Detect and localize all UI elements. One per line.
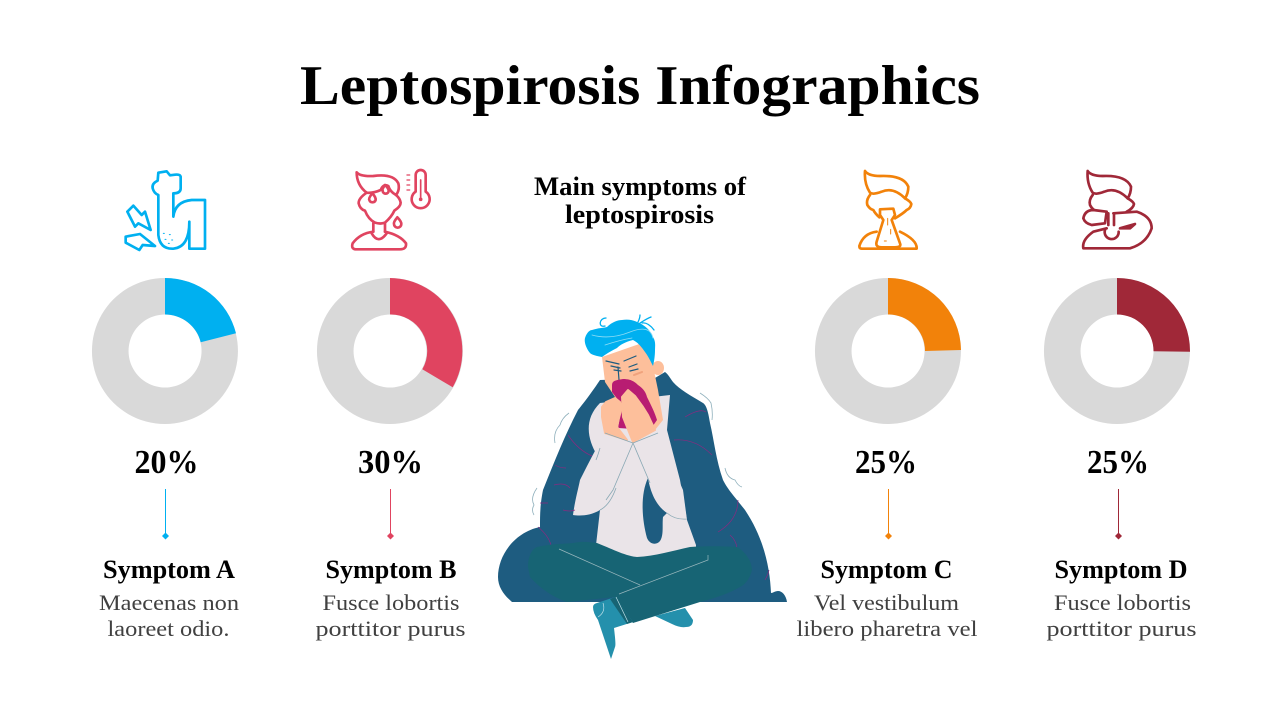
description B: Fusce lobortis (322, 590, 460, 615)
value: 30%: 30% (358, 444, 423, 481)
shiver lines (532, 393, 742, 515)
shirt (573, 395, 696, 565)
value: 25%: 25% (855, 444, 917, 481)
description C: Vel vestibulum (814, 590, 959, 615)
heading: Symptom A: Symptom A (103, 555, 235, 584)
hair strands (592, 315, 654, 345)
icon: arm with muscle pain (126, 171, 205, 250)
description D (1046, 590, 1196, 641)
leader line (387, 489, 394, 540)
panel: center illustration, sick man in blanket (498, 315, 787, 659)
hair (585, 320, 655, 366)
heading: Symptom D: Symptom D (1054, 555, 1188, 584)
description A: Maecenas non (99, 590, 239, 615)
donut chart: 30% (317, 278, 463, 424)
leader line (885, 489, 892, 540)
gap between arms (643, 478, 667, 544)
description C: libero pharetra vel (796, 616, 978, 641)
description B: porttitor purus (316, 616, 466, 641)
value: 20%: 20% (134, 444, 198, 481)
tissue (612, 379, 657, 430)
facial details (606, 356, 642, 380)
leader line (162, 489, 169, 540)
title: Leptospirosis Infographics (300, 55, 980, 117)
heading: Symptom B: Symptom B (326, 555, 456, 584)
blanket (498, 372, 787, 602)
panel: symptom B (316, 170, 466, 641)
blanket wrinkles (538, 411, 769, 580)
hands (602, 390, 655, 442)
ear (652, 361, 664, 375)
panel: symptom D (1044, 171, 1196, 641)
description A: laoreet odio. (108, 616, 230, 641)
description A (99, 590, 239, 641)
sleeve seams (596, 433, 687, 519)
icon: man vomiting (859, 171, 917, 249)
heading: Symptom C: Symptom C (820, 555, 952, 584)
description D: Fusce lobortis (1054, 590, 1191, 615)
subtitle: main symptoms: Main symptoms of (534, 172, 746, 201)
boot (593, 597, 633, 659)
subtitle: main symptoms: leptospirosis (565, 200, 714, 229)
description D: porttitor purus (1046, 616, 1196, 641)
icon: man with stomach pain (1083, 171, 1152, 248)
description C (796, 590, 978, 641)
face and neck (602, 342, 663, 442)
panel: symptom A (92, 171, 239, 641)
trousers (528, 542, 752, 623)
leader line (1115, 489, 1122, 540)
donut chart: 25% orange (815, 278, 961, 424)
panel: symptom C (796, 171, 978, 641)
description B (316, 590, 466, 641)
value: 25%: 25% (1087, 444, 1149, 481)
clothing seams (559, 549, 708, 624)
donut chart: 20% (92, 278, 238, 424)
back foot (655, 608, 693, 627)
icon: man with fever (352, 170, 430, 249)
subtitle: main symptoms (534, 172, 746, 229)
donut chart: 25% red (1044, 278, 1190, 424)
